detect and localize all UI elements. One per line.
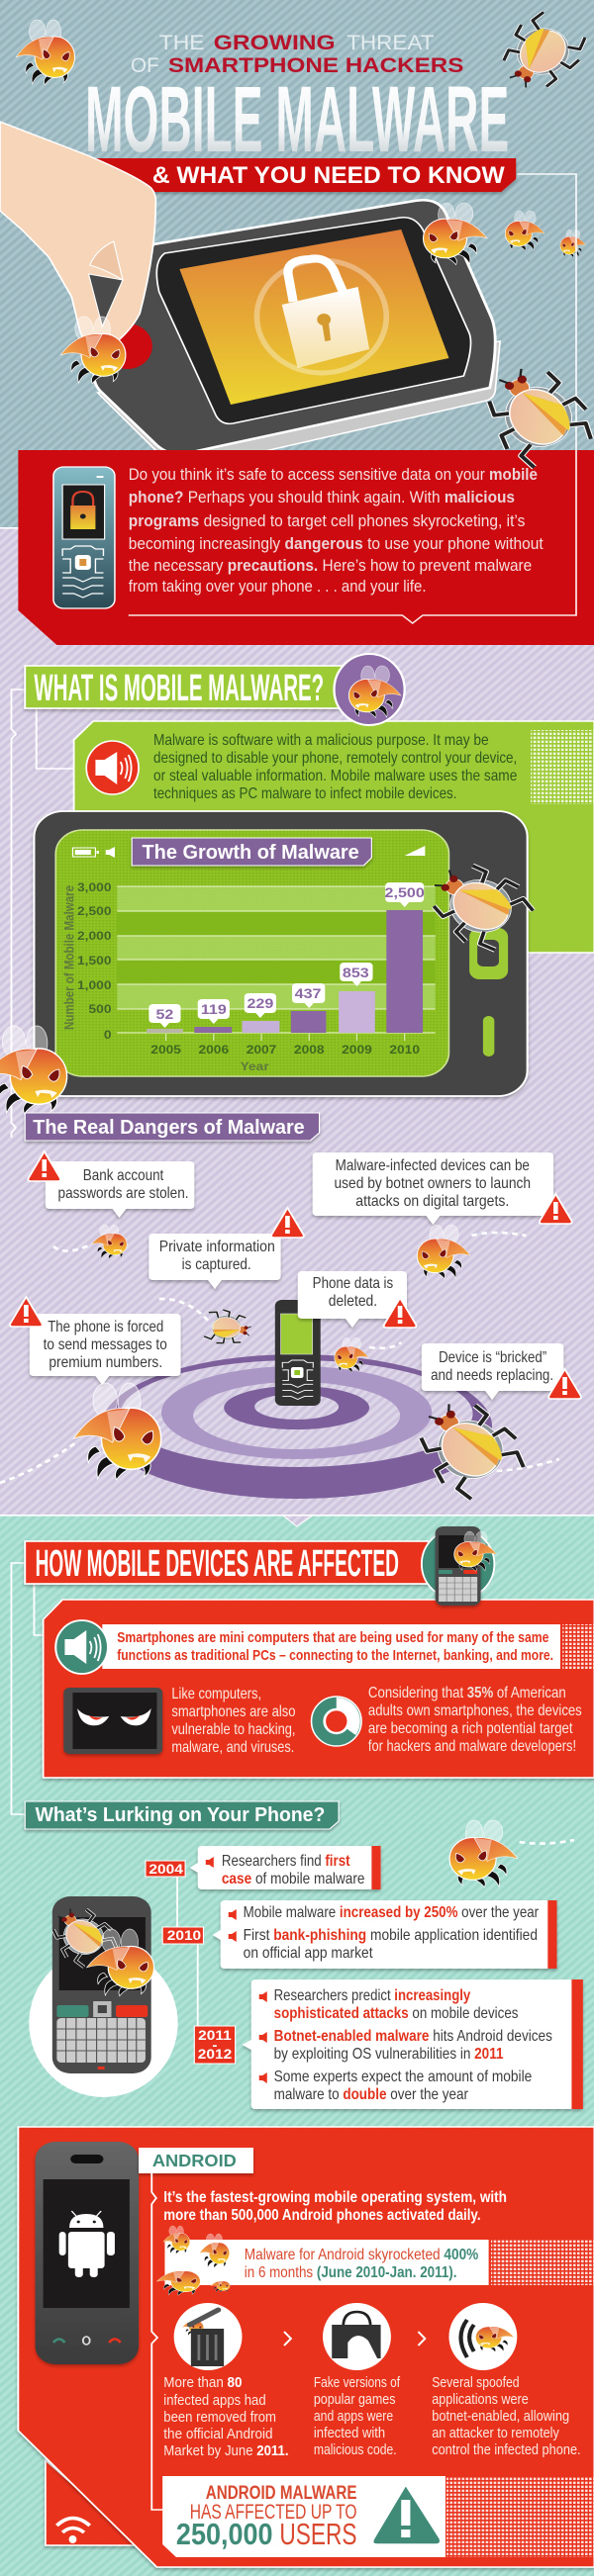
timeline entry 2010 [162, 1900, 556, 1969]
icon: beetle on phone [42, 1899, 123, 1971]
icon: lock phone [53, 467, 115, 608]
year tag: 2012 [198, 2048, 232, 2063]
icon: padlock [256, 258, 386, 373]
text: like computers [171, 1685, 295, 1756]
year tag [194, 2026, 236, 2064]
phone buttons [469, 928, 508, 1057]
bar chart: 437 [295, 986, 321, 1002]
chart title tag: The Growth of Malware [142, 841, 359, 864]
y axis title: Number of Mobile Malware [61, 885, 77, 1030]
callout: 250,000 users: 250,000 [176, 2518, 273, 2551]
title line: of smartphone hackers: OF [131, 53, 159, 77]
connector line [129, 174, 576, 623]
callout: 250,000 users: ANDROID MALWARE [206, 2482, 356, 2504]
bee swarm [156, 2226, 230, 2295]
connectors: what is malware [11, 690, 74, 1138]
icon: trash can [174, 2303, 243, 2370]
intro text: the necessary precautions. Here’s how to prevent malware [129, 555, 532, 575]
icon: central phone [275, 1300, 321, 1406]
text: fake versions: and apps were [314, 2408, 393, 2425]
callout: phone data: deleted. [329, 1292, 377, 1310]
bar chart [61, 880, 436, 1073]
title line: the growing threat: THE [159, 31, 205, 54]
white strip: 400%: in 6 months (June 2010-Jan. 2011). [245, 2263, 456, 2281]
dot pattern [531, 730, 594, 804]
callout: phone data [298, 1271, 416, 1328]
callout: private information: Private information [159, 1238, 275, 1255]
bar chart: 52 [156, 1007, 173, 1023]
callout: private information: is captured. [182, 1255, 251, 1273]
callout: private information [148, 1208, 304, 1289]
dangers bugs [73, 1225, 534, 1506]
icon: bee lurking [449, 1820, 518, 1887]
text: spoofed apps: Several spoofed [432, 2374, 520, 2391]
dangers callouts [10, 1151, 581, 1400]
intro text: becoming increasingly dangerous to use your phone without [129, 533, 544, 553]
icon: small beetle [203, 1308, 253, 1347]
timeline entry 2004: case of mobile malware [222, 1870, 364, 1887]
phone screen [179, 230, 448, 405]
white strip: 400% [156, 2226, 594, 2295]
icon: speaker [86, 741, 139, 794]
x axis labels: 2006 [199, 1043, 229, 1057]
callout: premium messages: The phone is forced [48, 1318, 163, 1335]
hero smartphone with lock [94, 200, 500, 469]
icon: bee near phone [335, 1337, 368, 1372]
text: fake versions: malicious code. [314, 2441, 397, 2458]
icon: signal bee [448, 2303, 517, 2370]
year tag: 2010 [167, 1929, 201, 1944]
connectors: how devices affected [11, 1563, 46, 1814]
callout: botnet attacks [313, 1152, 572, 1225]
text: fake versions: popular games [314, 2391, 395, 2408]
title line: of smartphone hackers: SMARTPHONE HACKERS [168, 53, 463, 77]
icon: infected qwerty phone [29, 1896, 178, 2097]
badge: bee in purple circle [334, 654, 405, 725]
lead text [163, 2188, 507, 2224]
icon: bee on phone [423, 203, 487, 265]
text: spoofed apps [432, 2374, 581, 2458]
title line: the growing threat [159, 31, 435, 54]
status icons [72, 846, 425, 858]
timeline entry 2010: First bank-phishing mobile application identified [244, 1926, 538, 1944]
text: considering 35%: Considering that 35% of American [368, 1684, 566, 1702]
intro text: from taking over your phone . . . and your life. [129, 576, 426, 596]
corner tab with wifi [46, 2460, 142, 2545]
x axis labels: 2010 [389, 1043, 420, 1057]
icon: bee held by fingers [60, 317, 126, 384]
badge: phone with bee [422, 1526, 497, 1606]
white strip [102, 1624, 594, 1669]
text: 80 apps [163, 2374, 289, 2459]
text: spoofed apps: applications were [432, 2391, 529, 2408]
timeline entry 2010: on official app market [244, 1944, 373, 1962]
timeline entry 2011-2012: Botnet-enabled malware hits Android devices [274, 2027, 552, 2045]
text: fake versions [314, 2374, 400, 2458]
callout: bricked device: and needs replacing. [431, 1366, 553, 1384]
value labels [148, 882, 424, 1028]
x axis labels: 2005 [150, 1043, 181, 1057]
icon: warning [384, 1298, 416, 1328]
text: considering 35% [368, 1684, 582, 1755]
callout: 250,000 users: USERS [279, 2518, 356, 2551]
heading: the real dangers of malware: The Real Dangers of Malware [33, 1116, 305, 1139]
y axis labels: 3,000 [77, 880, 111, 894]
icon: beetle top right [489, 7, 593, 100]
text: 80 apps: Market by June 2011. [163, 2442, 289, 2459]
icon: infected app bag [323, 2303, 391, 2370]
text: 80 apps: infected apps had [163, 2392, 266, 2409]
title block [85, 31, 516, 192]
callout: bricked device: Device is “bricked” [439, 1348, 546, 1366]
bar chart: 119 [201, 1002, 227, 1018]
column text [163, 2374, 581, 2459]
callout: botnet attacks: used by botnet owners to launch [334, 1174, 531, 1192]
bars [147, 910, 423, 1033]
text: like computers: smartphones are also [171, 1702, 295, 1720]
panel: android [18, 2127, 594, 2567]
callout: botnet attacks: Malware-infected devices can be [336, 1156, 530, 1174]
icon: bee top left [16, 20, 75, 85]
intro text: Do you think it’s safe to access sensitive data on your mobile [129, 464, 538, 484]
icon: warning [28, 1151, 60, 1181]
x axis labels: 2008 [294, 1043, 325, 1057]
timeline entry 2011-2012: by exploiting OS vulnerabilities in 2011 [274, 2045, 504, 2063]
text: like computers: vulnerable to hacking, [171, 1720, 295, 1738]
icon: android phone [36, 2142, 139, 2364]
bar chart: 2,500 [385, 885, 425, 901]
icon: beetle on chart [416, 851, 541, 958]
bar chart: 229 [247, 996, 273, 1012]
definition text: Malware is software with a malicious purpose. It may be [153, 731, 489, 749]
callout: bank passwords [28, 1151, 194, 1218]
callout: 250,000 users [162, 2476, 594, 2557]
callout: premium messages: to send messages to [44, 1335, 167, 1353]
year tag: 2004 [148, 1863, 183, 1878]
y axis labels: 1,000 [77, 978, 111, 992]
panel: intro [0, 174, 594, 645]
donut chart 35% [312, 1697, 361, 1746]
background: top section [0, 0, 594, 529]
white strip: 400%: Malware for Android skyrocketed 400% [245, 2246, 478, 2263]
red home button [102, 323, 152, 369]
lead text: more than 500,000 Android phones activated daily. [163, 2206, 481, 2224]
y axis labels: 2,000 [77, 929, 111, 943]
icon: bee right [417, 1225, 470, 1279]
timeline entry 2004: Researchers find first [222, 1852, 350, 1870]
x axis labels: 2007 [247, 1043, 276, 1057]
x axis labels [150, 1043, 420, 1073]
phone buttons [53, 2337, 121, 2345]
chevron [418, 2332, 425, 2346]
trails [0, 1233, 574, 1844]
x axis labels: 2009 [342, 1043, 372, 1057]
icon: warning [540, 1194, 572, 1224]
icon: warning [10, 1297, 43, 1327]
icon: big bee chart corner [0, 1026, 67, 1114]
icon: speaker teal [55, 1620, 108, 1674]
icon: small bee [92, 1225, 127, 1258]
text: 80 apps: the official Android [163, 2426, 273, 2442]
text: 80 apps: been removed from [163, 2409, 276, 2426]
panel: how devices are affected [44, 1600, 594, 1778]
callout: premium messages [10, 1297, 181, 1385]
icon: bee on phone [87, 1929, 154, 1996]
bar chart: 853 [343, 966, 369, 981]
timeline entry 2011-2012: sophisticated attacks on mobile devices [274, 2004, 518, 2022]
background: dangers section [0, 527, 594, 1516]
background: affected section [0, 1515, 594, 2576]
hand holding a bug [0, 122, 155, 384]
timeline entry 2011-2012 [194, 1979, 583, 2109]
icon: beetle on panel [471, 354, 594, 473]
callout: bank passwords: Bank account [83, 1166, 164, 1184]
callout: 250,000 users: HAS AFFECTED UP TO [190, 2500, 356, 2524]
heading: what's lurking on your phone: What’s Lurking on Your Phone? [36, 1803, 325, 1826]
heading: what is mobile malware [25, 654, 405, 725]
keyboard [56, 2018, 146, 2063]
panel: what is mobile malware [74, 721, 594, 953]
text: like computers: malware, and viruses. [171, 1738, 294, 1756]
icon: warning [548, 1369, 581, 1399]
icon: tablet with evil eyes [63, 1688, 162, 1754]
year tag: 2011 [198, 2029, 232, 2044]
chart screen [55, 830, 448, 1076]
icon: bee medium [505, 211, 544, 250]
y axis labels [77, 880, 111, 1042]
timeline connector [177, 1877, 198, 2026]
text: fake versions: infected with [314, 2425, 385, 2441]
callout: botnet attacks: attacks on digital targets. [355, 1192, 509, 1210]
text: fake versions: Fake versions of [314, 2374, 400, 2391]
timeline entry 2011-2012: malware to double over the year [274, 2085, 468, 2103]
callout: bricked device [422, 1343, 581, 1400]
title line: the growing threat: THREAT [346, 31, 435, 54]
timeline entry 2004 [146, 1846, 381, 1889]
icon: large beetle [403, 1388, 534, 1506]
definition text [153, 731, 517, 802]
intro text [129, 464, 544, 596]
tag: android: ANDROID [152, 2151, 237, 2171]
y axis labels: 1,500 [77, 954, 111, 967]
timeline entry 2010: Mobile malware increased by 250% over the year [244, 1903, 539, 1921]
callout: phone data: Phone data is [313, 1274, 393, 1292]
x axis labels: Year [241, 1059, 269, 1073]
chevron [284, 2332, 291, 2346]
bug cluster: header [16, 7, 593, 265]
icon: android robot [59, 2211, 115, 2277]
text: 80 apps: More than 80 [163, 2374, 243, 2391]
panel: phone with growth chart [34, 811, 541, 1096]
tag: android [139, 2148, 253, 2173]
text: like computers: Like computers, [171, 1685, 261, 1702]
definition text: techniques as PC malware to infect mobile devices. [153, 784, 456, 802]
y axis labels: 2,500 [77, 904, 111, 918]
icon: bee small [560, 230, 586, 257]
icon: teal warning [373, 2485, 441, 2544]
callout: bank passwords: passwords are stolen. [58, 1184, 189, 1202]
callout: premium messages: premium numbers. [49, 1353, 162, 1371]
timeline entry 2011-2012: Researchers predict increasingly [274, 1986, 471, 2004]
year tag: - [212, 2039, 218, 2054]
icon: warning [271, 1208, 304, 1238]
target rings [101, 1354, 492, 1499]
heading: how mobile devices are affected [25, 1526, 497, 1606]
title line: the growing threat: GROWING [214, 31, 336, 54]
icon: large bee [73, 1383, 161, 1480]
intro text: phone? Perhaps you should think again. With malicious [129, 487, 515, 506]
connector line [151, 2173, 162, 2510]
banner: and what you need to know [91, 158, 516, 192]
y axis labels: 0 [104, 1028, 111, 1042]
y axis labels: 500 [89, 1002, 111, 1016]
banner: and what you need to know: & WHAT YOU NEED TO KNOW [152, 163, 505, 189]
